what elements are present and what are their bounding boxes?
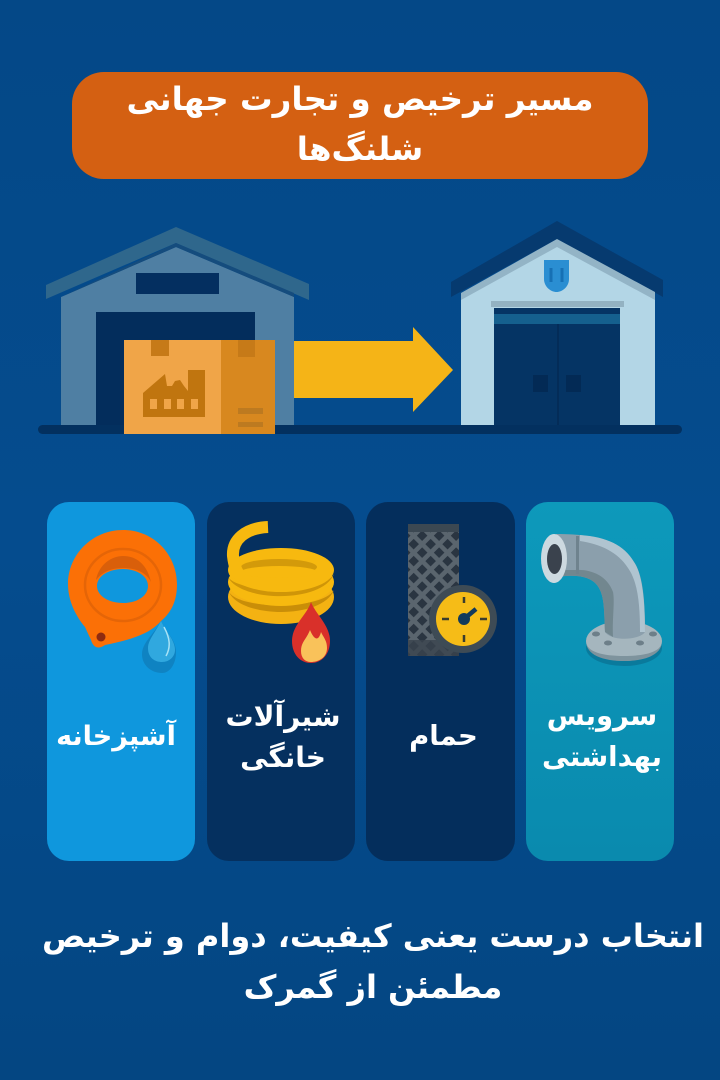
title banner [72,72,648,179]
icon: elbow pipe [541,534,662,666]
card: sanitary service [526,502,674,861]
card: bathroom [366,502,515,861]
customs warehouse [451,221,663,425]
footer message: مطمئن از گمرک [244,968,502,1006]
arrow [294,327,453,412]
title text: شلنگ‌ها [297,130,423,168]
footer message [42,917,704,1006]
title text [127,80,593,168]
icon: braided hose with gauge [408,524,497,656]
card label: sanitary service: بهداشتی [542,741,662,773]
ground line [38,425,682,434]
shipping box with factory icon [124,340,275,434]
origin warehouse [46,227,309,425]
footer message: انتخاب درست یعنی کیفیت، دوام و ترخیص [42,917,704,955]
card label: sanitary service [542,700,662,773]
card label: household faucets [226,699,340,774]
card: household faucets [207,502,355,861]
card label: household faucets: خانگی [240,741,326,774]
card label: kitchen: آشپزخانه [56,721,176,752]
card label: household faucets: شیرآلات [226,700,340,733]
card label: bathroom: حمام [409,720,478,752]
card: kitchen [47,502,195,861]
icon: yellow coil with flame [228,527,334,663]
title text: مسیر ترخیص و تجارت جهانی [127,80,593,118]
icon: orange hose coil with water drop [68,530,177,673]
card label: sanitary service: سرویس [547,700,657,732]
